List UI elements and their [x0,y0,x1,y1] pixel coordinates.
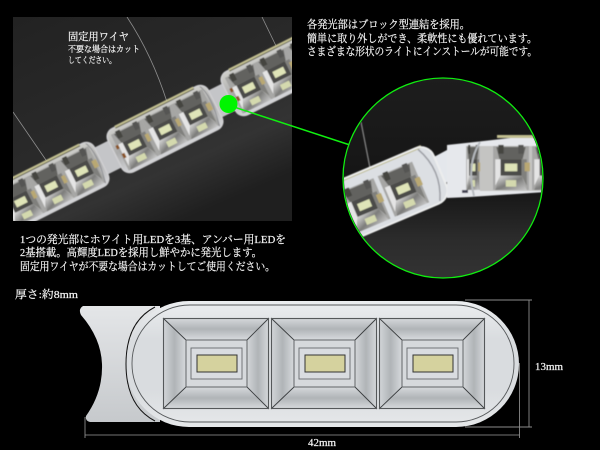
text: LED description [20,232,286,273]
LED frame 1 [163,318,269,409]
LED frame 2 [271,318,377,409]
panel: magnified connector circle [342,77,544,279]
right block [446,134,542,199]
inner outline [132,305,514,422]
text: block connection description [307,17,537,58]
dimension: 42mm: 42mm [308,438,336,449]
text: LED description: 固定用ワイヤが不要な場合はカットしてご使用ください。 [20,259,275,273]
dimension: 13mm [465,300,563,427]
callout line [234,107,350,145]
wire caption: してください。 [68,55,116,65]
callout dot [220,95,238,113]
flexible connector [434,150,448,184]
LED frame 3 [379,318,485,409]
left block [344,144,448,238]
label: thickness: 厚さ:約8mm [15,288,78,301]
wire caption: 不要な場合はカット [68,44,140,54]
text: LED description: 1つの発光部にホワイト用LEDを3基、アンバー用LEDを [20,232,286,246]
panel: product photo [13,17,292,221]
pill body [126,301,519,427]
wing base [80,306,160,422]
text: block connection description: さまざまな形状のライトにインストールが可能です。 [307,44,537,58]
text: LED description: 2基搭載。高輝度LEDを採用し鮮やかに発光します。 [20,245,262,259]
wire in zoom [361,122,370,168]
LED strip with three block modules [13,36,292,221]
black left edge [126,307,155,421]
wire caption [68,30,140,65]
wire caption: 固定用ワイヤ [68,30,129,43]
text: block connection description: 各発光部はブロック型連結を採用。 [307,17,470,31]
diagram: LED block technical drawing [80,301,519,427]
fixing wires [13,17,278,163]
dimension: 13mm: 13mm [535,361,563,373]
text: block connection description: 簡単に取り外しができ、柔軟性にも優れています。 [307,31,537,45]
dimension: 42mm [85,363,520,449]
